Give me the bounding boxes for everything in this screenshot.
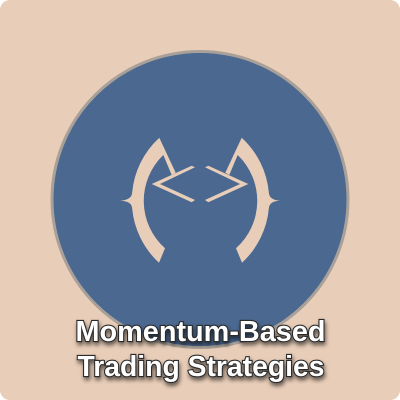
title line 1: Momentum-Based [76, 316, 326, 348]
right arc [225, 138, 280, 263]
left chevron [152, 166, 195, 202]
circle badge [52, 52, 348, 348]
left arc [120, 138, 176, 263]
icon: momentum arcs and chevrons [120, 138, 280, 263]
title line 2: Trading Strategies [78, 351, 324, 383]
right chevron [205, 166, 248, 202]
title [76, 316, 326, 383]
